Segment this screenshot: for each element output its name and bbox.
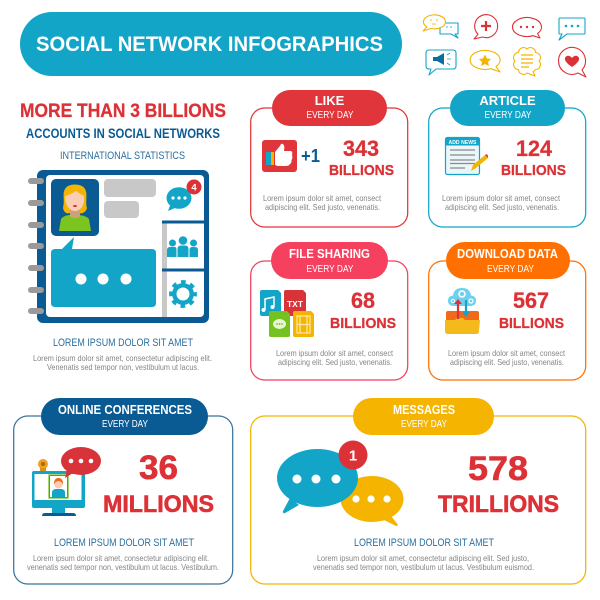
value: 567 billions: BILLIONS xyxy=(499,315,564,332)
icon: thumbs up plus one xyxy=(262,140,320,172)
description heading: LOREM IPSUM DOLOR SIT AMET xyxy=(54,537,194,549)
value: 567 billions xyxy=(499,288,564,332)
side column dividers xyxy=(162,220,205,317)
value: 124 billions: BILLIONS xyxy=(501,162,566,179)
description: Lorem ipsum dolor sit amet, consect xyxy=(276,348,394,358)
panel: online conferences xyxy=(14,398,233,584)
header pill: online conferences: ONLINE CONFERENCES xyxy=(58,402,192,417)
icon: notes scalloped bubble xyxy=(514,48,540,76)
icon: star bubble xyxy=(470,50,500,72)
file: film xyxy=(293,311,314,337)
subheading: international statistics: INTERNATIONAL STATISTICS xyxy=(60,150,185,162)
panel: like xyxy=(251,90,408,227)
value: 36 millions: 36 xyxy=(139,449,178,487)
value: 343 billions: BILLIONS xyxy=(329,162,394,179)
header pill: download data: EVERY DAY xyxy=(487,263,534,275)
value: 124 billions xyxy=(501,136,566,179)
icon row: speech bubble set xyxy=(423,15,586,77)
yellow bubble xyxy=(340,476,404,526)
header pill: messages: MESSAGES xyxy=(393,402,455,417)
text placeholder bars xyxy=(104,179,156,218)
avatar card xyxy=(51,179,99,236)
description: Lorem ipsum dolor sit amet, consect xyxy=(448,348,566,358)
header pill: article: EVERY DAY xyxy=(484,109,532,121)
value: 36 millions: MILLIONS xyxy=(103,491,214,518)
header pill: download data xyxy=(446,242,570,279)
description: adipiscing elit. Sed justo, venenatis. xyxy=(265,202,380,212)
header pill: file sharing xyxy=(271,242,388,279)
icon: faces chat xyxy=(423,15,458,38)
value: 68 billions: 68 xyxy=(351,288,375,313)
description: adipiscing elit. Sed justo, venenatis. xyxy=(450,357,564,367)
icon: cloud and folder xyxy=(445,288,480,334)
description xyxy=(263,193,382,212)
value: 578 trillions: TRILLIONS xyxy=(438,491,559,518)
icon: dots oval bubble xyxy=(512,18,541,38)
description: Lorem ipsum dolor sit amet, consectetur adipiscing elit. xyxy=(33,553,209,563)
illustration: profile notebook xyxy=(28,170,209,323)
title banner xyxy=(20,12,402,76)
panel: accounts summary xyxy=(20,100,226,372)
description xyxy=(442,193,561,212)
caption text: Lorem ipsum dolor sit amet, consectetur adipiscing elit. xyxy=(33,353,212,363)
icon: plus bubble xyxy=(474,15,498,39)
icon: news document with pencil xyxy=(446,138,488,174)
header pill: messages xyxy=(353,398,494,435)
speech bubble xyxy=(61,447,101,478)
panel: file sharing xyxy=(251,242,408,380)
header pill: file sharing: FILE SHARING xyxy=(289,246,370,261)
header pill: article: ARTICLE xyxy=(479,93,536,108)
value: 68 billions xyxy=(330,288,396,332)
description: Lorem ipsum dolor sit amet, consect xyxy=(442,193,561,203)
header pill: like: EVERY DAY xyxy=(306,109,354,121)
icon: settings gear xyxy=(171,282,195,306)
file: txt: TXT xyxy=(287,299,304,309)
value: 567 billions: 567 xyxy=(513,288,549,313)
value: 343 billions xyxy=(329,136,394,179)
description: venenatis sed tempor non, vestibulum ut lacus. Vestibulum. xyxy=(27,562,219,572)
description xyxy=(276,348,394,367)
description xyxy=(313,553,534,572)
icon: news document with pencil: ADD NEWS xyxy=(448,140,477,146)
file: music xyxy=(260,290,281,316)
value: 124 billions: 124 xyxy=(516,136,552,161)
caption text: Venenatis sed tempor non, vestibulum ut lacus. xyxy=(47,362,199,372)
heading: more than 3 billions: MORE THAN 3 BILLIONS xyxy=(20,100,226,122)
value: 36 millions xyxy=(103,449,214,518)
blue bubble xyxy=(277,449,358,513)
panel: download data xyxy=(429,242,586,380)
file: chat xyxy=(269,311,290,337)
title banner: SOCIAL NETWORK INFOGRAPHICS xyxy=(36,33,383,56)
header pill: like xyxy=(272,90,387,126)
description xyxy=(448,348,566,367)
icon: video call monitor xyxy=(32,447,101,516)
description heading: LOREM IPSUM DOLOR SIT AMET xyxy=(354,537,494,549)
header pill: online conferences xyxy=(41,398,208,435)
description: adipiscing elit. Sed justo, venenatis. xyxy=(445,202,559,212)
caption heading: LOREM IPSUM DOLOR SIT AMET xyxy=(53,337,193,349)
value: 578 trillions: 578 xyxy=(468,450,528,488)
large message bubble xyxy=(51,237,156,307)
header pill: online conferences: EVERY DAY xyxy=(102,418,148,430)
header pill: like: LIKE xyxy=(315,93,345,108)
icon: chat bubbles xyxy=(277,440,404,526)
subheading: accounts: ACCOUNTS IN SOCIAL NETWORKS xyxy=(26,126,220,141)
panel: messages xyxy=(251,398,586,584)
notification badge: 1 xyxy=(349,448,357,464)
header pill: article xyxy=(450,90,565,126)
description: adipiscing elit. Sed justo, venenatis. xyxy=(278,357,392,367)
panel: article xyxy=(429,90,586,227)
value: 343 billions: 343 xyxy=(343,136,379,161)
icon: heart bubble xyxy=(559,47,586,77)
icon: people group xyxy=(167,236,198,257)
icon: chat notification xyxy=(166,180,202,211)
icon: megaphone bubble xyxy=(426,50,456,75)
header pill: messages: EVERY DAY xyxy=(401,418,447,430)
icon: dots square bubble xyxy=(559,18,585,40)
description: venenatis sed tempor non, vestibulum ut lacus. Vestibulum euismod. xyxy=(313,562,534,572)
icon: chat notification: 4 xyxy=(191,182,197,194)
value: 68 billions: BILLIONS xyxy=(330,315,396,332)
description xyxy=(27,553,219,572)
caption text xyxy=(33,353,212,372)
header pill: download data: DOWNLOAD DATA xyxy=(457,246,559,261)
icon: thumbs up plus one: +1 xyxy=(301,146,320,166)
header pill: file sharing: EVERY DAY xyxy=(306,263,354,275)
description: Lorem ipsum dolor sit amet, consectetur adipiscing elit. Sed justo, xyxy=(317,553,529,563)
description: Lorem ipsum dolor sit amet, consect xyxy=(263,193,382,203)
value: 578 trillions xyxy=(438,450,559,518)
icon: shared file types xyxy=(260,290,314,337)
